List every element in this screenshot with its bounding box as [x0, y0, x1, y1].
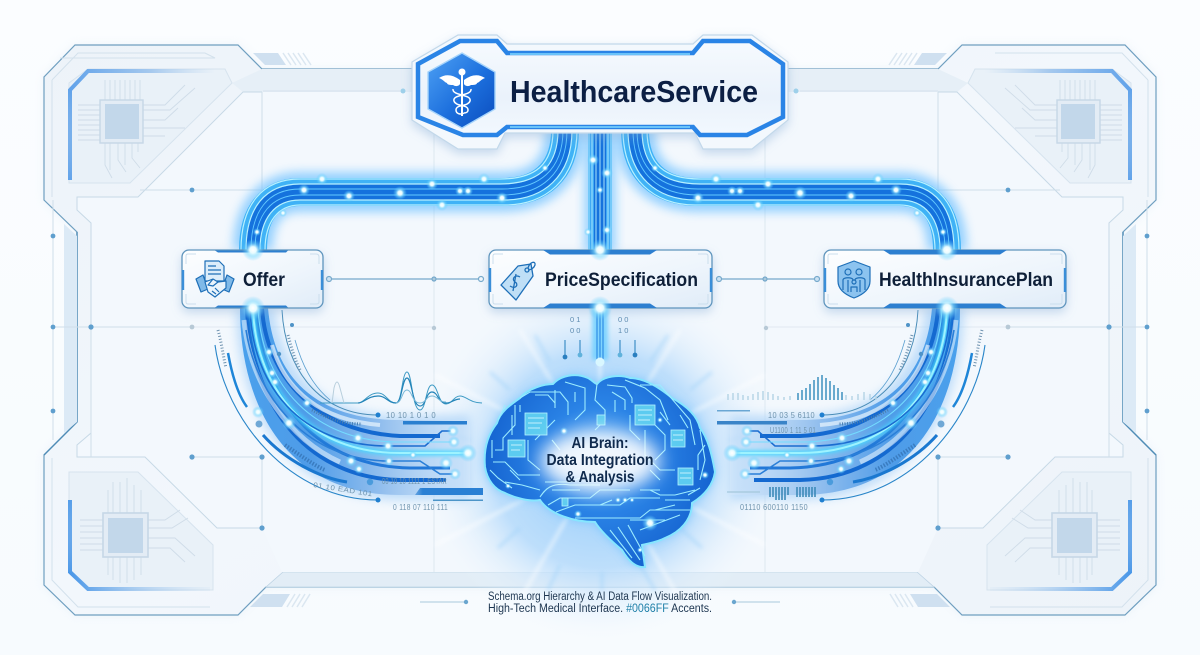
- connector: Offer to PriceSpecification: [326, 276, 484, 282]
- caption: [488, 591, 712, 615]
- tube: right connector top: [623, 130, 959, 250]
- brain glow: [485, 375, 715, 567]
- panel: circuit corner top left: [69, 69, 232, 183]
- card: HealthInsurancePlan: [824, 250, 1066, 308]
- fan: right data stream into brain: [723, 308, 985, 502]
- connector: PriceSpecification to HealthInsurancePlan: [716, 276, 820, 282]
- binary text readouts: 0 118 07 110 111: [393, 503, 448, 512]
- card: PriceSpecification: [489, 250, 712, 308]
- binary bars and barcode: [397, 410, 815, 501]
- title: HealthcareService: HealthcareService: [510, 74, 758, 109]
- binary text readouts: 10 10 1 0 1 0: [386, 411, 436, 420]
- brain outline: [485, 375, 715, 567]
- binary text readouts: U1100 1 11 5 01: [770, 426, 816, 435]
- caption: Schema.org Hierarchy & AI Data Flow Visualization.: [488, 591, 712, 603]
- panel: circuit corner bottom right: [987, 472, 1131, 590]
- binary text readouts: [313, 411, 816, 512]
- binary text readouts: 00 10 10 1111 1 ESTAR: [382, 477, 447, 486]
- label: Offer: Offer: [243, 269, 285, 291]
- panel: inner central field: [77, 92, 1123, 572]
- grid lines and nodes: [51, 92, 1149, 572]
- label: PriceSpecification: PriceSpecification: [545, 269, 698, 291]
- central drop from PriceSpecification to brain: 0 1: [570, 315, 580, 324]
- waveform: right signal bars: [728, 375, 876, 400]
- caption: High-Tech Medical Interface. #0066FF Accents.: [488, 603, 712, 615]
- root node: HealthcareService: [263, 35, 938, 149]
- root node outer shell: [412, 35, 788, 149]
- brain label: [546, 435, 654, 486]
- tube: central connector top: [584, 130, 616, 252]
- binary text readouts: 10 03 5 6110: [768, 411, 815, 420]
- label: HealthInsurancePlan: HealthInsurancePlan: [879, 269, 1053, 291]
- central drop from PriceSpecification to brain: [563, 308, 637, 366]
- panel: circuit corner bottom left: [69, 472, 213, 590]
- brain document nodes: [508, 405, 693, 506]
- icon: price tag: [501, 262, 535, 300]
- brain: AI data integration: [485, 375, 715, 567]
- brain label: & Analysis: [566, 469, 634, 486]
- binary text readouts: 01110 600110 1150: [740, 503, 808, 512]
- central drop from PriceSpecification to brain: 0 0: [618, 315, 628, 324]
- icon: family shield: [838, 261, 870, 298]
- panel: circuit corner top right: [968, 69, 1131, 183]
- fan: left data stream into brain: [215, 308, 477, 502]
- caption side nodes: [420, 600, 780, 604]
- root node body: [418, 41, 783, 135]
- icon: document and handshake: [196, 261, 234, 297]
- tube: left connector top: [241, 130, 577, 250]
- card: Offer: [182, 250, 323, 308]
- burst rays around brain: [420, 280, 780, 640]
- brain label: Data Integration: [546, 452, 654, 469]
- waveform: left signal chart: [320, 372, 482, 410]
- connector glow nodes at card edges: [241, 239, 959, 320]
- central drop from PriceSpecification to brain: 0 0: [570, 326, 580, 335]
- icon: caduceus hexagon: [428, 53, 495, 128]
- brain label: AI Brain:: [572, 435, 628, 452]
- brain circuit traces: [490, 380, 705, 560]
- central drop from PriceSpecification to brain: 1 0: [618, 326, 628, 335]
- brain centre glow: [540, 430, 660, 492]
- binary text readouts: 01 10 EAD 101: [313, 482, 373, 498]
